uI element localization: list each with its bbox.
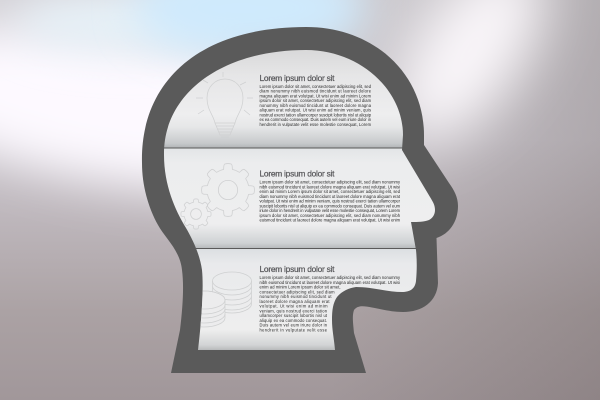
text block: panel 2: euismod tincidunt ut laoreet dolore magna aliquam erat volutpat. Ut wisi enim bbox=[260, 218, 401, 223]
text block: panel 3: hendrerit in vulputate velit esse bbox=[260, 327, 328, 332]
icon: light bulb bbox=[196, 72, 253, 137]
text block: panel 1: aliquam erat volutpat. Ut wisi enim ad minim veniam, quis bbox=[260, 108, 371, 113]
text block: panel 2: Lorem ipsum dolor sit amet, consectetuer adipiscing elit, sed diam nonummy bbox=[260, 180, 401, 185]
text block: panel 3: enim ad minim Lorem ipsum dolor sit amet, bbox=[260, 285, 340, 290]
text block: panel 1: nostrud exerci tation ullamcorper suscipit lobortis nisl ut aliquip bbox=[260, 112, 372, 117]
text block: panel 3: aliquip ex ea commodo consequat. bbox=[260, 318, 327, 323]
text block: panel 3: consectetuer adipiscing elit, sed diam bbox=[260, 289, 335, 294]
paper panels bbox=[164, 50, 435, 350]
text block: panel 2 bbox=[260, 180, 401, 223]
head silhouette bbox=[142, 27, 458, 373]
text block: panel 2: suscipit lobortis nisl ut aliquip ex ea commodo consequat. Duis autem vel eum bbox=[260, 203, 401, 208]
text block: panel 3: nonummy nibh euismod tincidunt ut bbox=[260, 294, 332, 299]
head infographic bbox=[142, 27, 458, 373]
text block: panel 1: magna aliquam erat volutpat. Ut wisi enim ad minim Lorem bbox=[260, 93, 372, 98]
text block: panel 3: ullamcorper suscipit lobortis nisl ut bbox=[260, 313, 328, 318]
text block: panel 2: enim ad minim Lorem ipsum dolor sit amet, consectetuer adipiscing elit, sed bbox=[260, 189, 401, 194]
text block: panel 1: Lorem ipsum dolor sit amet, consectetuer adipiscing elit, sed bbox=[260, 84, 372, 89]
text block: panel 2: iriure dolor in hendrerit in vulputate velit esse molestie consequat, Lorem Lorem bbox=[260, 208, 401, 213]
heading: panel 2: Lorem ipsum dolor sit bbox=[260, 168, 335, 178]
text block: panel 1: ipsum dolor sit amet, consectetuer adipiscing elit, sed diam bbox=[260, 98, 372, 103]
text block: panel 2: diam nonummy nibh euismod tincidunt ut laoreet dolore magna aliquam erat bbox=[260, 194, 401, 199]
text block: panel 1: diam nonummy nibh euismod tincidunt ut laoreet dolore bbox=[260, 89, 372, 94]
text block: panel 3: nibh euismod tincidunt ut laoreet dolore magna aliquam erat volutpat. Ut wisi bbox=[260, 280, 400, 285]
heading: panel 1: Lorem ipsum dolor sit bbox=[260, 73, 335, 83]
heading: panel 3: Lorem ipsum dolor sit bbox=[260, 264, 335, 274]
text block: panel 3: Lorem ipsum dolor sit amet, consectetuer adipiscing elit, sed diam nonummy bbox=[260, 275, 401, 280]
text block: panel 2: nibh euismod tincidunt ut laoreet dolore magna aliquam erat volutpat. Ut wisi bbox=[260, 184, 400, 189]
panel: finance bbox=[196, 249, 417, 350]
text block: panel 3: veniam, quis nostrud exerci tation bbox=[260, 308, 328, 313]
icon: coin stacks bbox=[200, 272, 252, 328]
text block: panel 2: volutpat. Ut wisi enim ad minim veniam, quis nostrud exerci tation ullamcorper bbox=[260, 199, 401, 204]
text block: panel 1: nonummy nibh euismod tincidunt ut laoreet dolore magna bbox=[260, 103, 372, 108]
text block: panel 1 bbox=[260, 84, 372, 127]
text block: panel 1: hendrerit in vulputate velit esse molestie consequat, Lorem bbox=[260, 122, 372, 127]
text block: panel 3: volutpat. Ut wisi enim ad minim bbox=[260, 304, 328, 309]
icon: large gear bbox=[202, 164, 254, 216]
panel: idea bbox=[164, 50, 403, 148]
text block: panel 3 bbox=[260, 275, 401, 332]
text block: panel 2: ipsum dolor sit amet, consectetuer adipiscing elit, sed diam nonummy nibh bbox=[260, 213, 401, 218]
panel: settings bbox=[150, 148, 450, 248]
icon: small gear bbox=[181, 199, 211, 229]
text block: panel 1: ex ea commodo consequat. Duis autem vel eum iriure dolor in bbox=[260, 117, 372, 122]
text block: panel 3: laoreet dolore magna aliquam erat bbox=[260, 299, 330, 304]
text block: panel 3: Duis autem vel eum iriure dolor in bbox=[260, 323, 328, 328]
